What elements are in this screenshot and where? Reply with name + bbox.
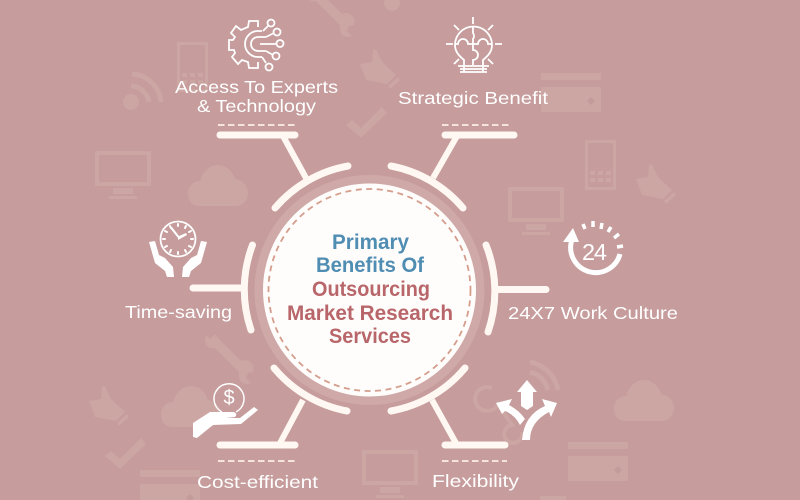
icon: gear with circuit <box>229 20 284 70</box>
icon: three-way arrows <box>496 380 557 440</box>
label: cost-efficient: Cost-efficient <box>197 472 318 492</box>
background pattern of faint icons <box>89 0 676 500</box>
arcs and connector spokes <box>193 135 546 445</box>
title: Benefits Of <box>316 254 425 277</box>
label: time-saving: Time-saving <box>125 302 232 322</box>
dashed accents <box>218 125 511 461</box>
title: Market Research <box>287 302 453 325</box>
label: access to experts: & Technology <box>197 96 316 116</box>
title: Services <box>329 325 411 348</box>
icon: clock in hands <box>149 222 207 277</box>
label: access to experts: Access To Experts <box>175 77 338 97</box>
icon: 24 hours: 24 <box>582 239 607 265</box>
label: 24x7 work culture: 24X7 Work Culture <box>508 303 678 323</box>
icon: 24 hours <box>563 221 623 273</box>
icon: puzzle light bulb <box>446 17 502 72</box>
label: strategic benefit: Strategic Benefit <box>398 88 548 108</box>
title: Outsourcing <box>312 278 430 301</box>
icon: hand holding dollar coin: $ <box>223 387 235 409</box>
title <box>287 231 453 348</box>
label: access to experts <box>175 77 338 116</box>
icon: hand holding dollar coin <box>193 384 258 438</box>
label: flexibility: Flexibility <box>432 471 519 491</box>
central circle <box>254 175 484 405</box>
title: Primary <box>332 231 409 254</box>
